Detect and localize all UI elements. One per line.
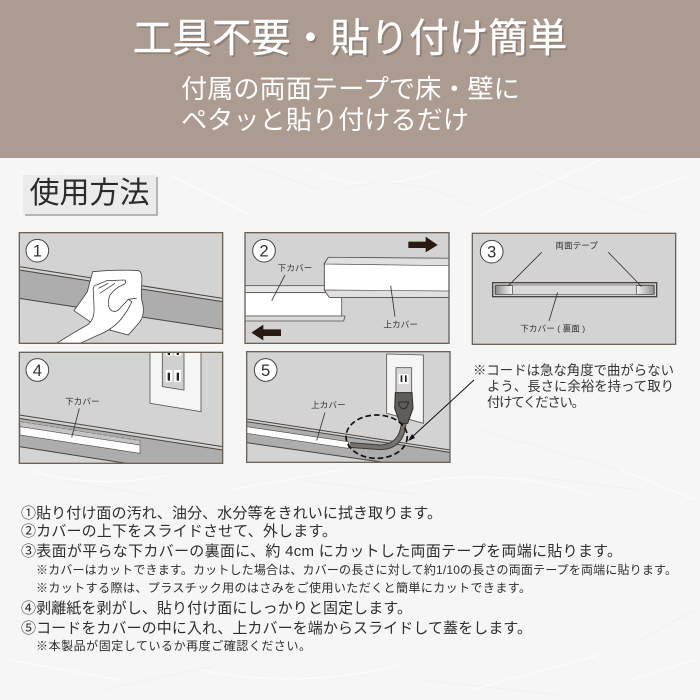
label: lower cover — [272, 263, 312, 301]
panel: step 4 fixing the lower cover — [19, 352, 223, 463]
icon: cloth and hand — [57, 270, 143, 343]
step number 5: 5 — [261, 361, 270, 380]
title: 工具不要・貼り付け簡単 — [133, 17, 567, 61]
label: upper cover — [311, 400, 346, 441]
arrow: left — [251, 325, 281, 340]
panel: step 5 cord inside cover — [247, 352, 450, 462]
panel: step 2 sliding covers apart — [245, 233, 449, 343]
lower cover strip — [20, 422, 140, 453]
step number 5 — [254, 359, 277, 381]
step number 3: 3 — [487, 243, 496, 262]
instruction 2: ②カバーの上下をスライドさせて、外します。 — [21, 523, 337, 540]
panel: step 1 wiping the surface — [19, 233, 223, 343]
arrow: callout leader — [408, 380, 474, 441]
note: cutting the cover: ※カバーはカットできます。カットした場合は、カバーの長さに対して約1/10の長さの両面テープを両端に貼ります。 — [36, 562, 677, 577]
step number 4: 4 — [33, 361, 42, 380]
label: lower cover reverse — [520, 292, 585, 333]
section heading: 使用方法: 使用方法 — [30, 177, 150, 210]
panel: step 3 tape on reverse side — [472, 233, 676, 344]
label: upper cover: 上カバー — [311, 400, 346, 410]
subtitle: 付属の両面テープで床・壁に — [181, 74, 520, 104]
instruction 5: ⑤コードをカバーの中に入れ、上カバーを端からスライドして蓋をします。 — [21, 620, 532, 637]
callout: cord bending note: 付けてください。 — [487, 395, 585, 410]
callout: cord bending note — [473, 363, 674, 410]
step number 2 — [253, 239, 275, 262]
subtitle — [181, 74, 520, 135]
upper cover — [324, 257, 449, 297]
icon: wall socket — [150, 352, 201, 412]
step number 4 — [26, 359, 49, 381]
instruction 4: ④剥離紙を剥がし、貼り付け面にしっかりと固定します。 — [21, 600, 412, 617]
note: scissors: ※カットする際は、プラスチック用のはさみをご使用いただくと簡単にカットできます。 — [36, 580, 531, 595]
label: double-sided tape: 両面テープ — [555, 241, 598, 251]
instruction 1: ①貼り付け面の汚れ、油分、水分等をきれいに拭き取ります。 — [21, 504, 442, 522]
upper cover strip — [247, 427, 348, 448]
step number 3 — [480, 240, 503, 263]
icon: wall socket and plug — [387, 354, 423, 423]
text block: instructions — [21, 504, 677, 653]
callout: cord bending note: よう、長さに余裕を持って取り — [487, 379, 674, 394]
step number 1 — [26, 239, 49, 262]
step number 1: 1 — [33, 242, 42, 261]
label: double-sided tape — [508, 241, 642, 287]
arrow: right — [408, 237, 438, 252]
lower cover reverse side — [493, 283, 657, 297]
dashed highlight circle — [346, 415, 407, 458]
icon: plug and cord — [350, 393, 413, 447]
step number 2: 2 — [259, 242, 269, 261]
label: lower cover — [65, 396, 100, 437]
header band — [0, 0, 700, 158]
label: lower cover: 下カバー — [278, 263, 312, 273]
label: upper cover: 上カバー — [383, 319, 418, 329]
callout: cord bending note: ※コードは急な角度で曲がらない — [473, 363, 674, 378]
label: lower cover: 下カバー — [65, 396, 100, 406]
note: check fixing: ※本製品が固定しているか再度ご確認ください。 — [36, 638, 311, 653]
label: upper cover — [383, 286, 418, 329]
subtitle: ペタッと貼り付けるだけ — [181, 105, 469, 135]
label: lower cover reverse: 下カバー ( 裏面 ) — [520, 322, 585, 333]
instruction 3: ③表面が平らな下カバーの裏面に、約 4cm にカットした両面テープを両端に貼ります。 — [21, 543, 622, 560]
